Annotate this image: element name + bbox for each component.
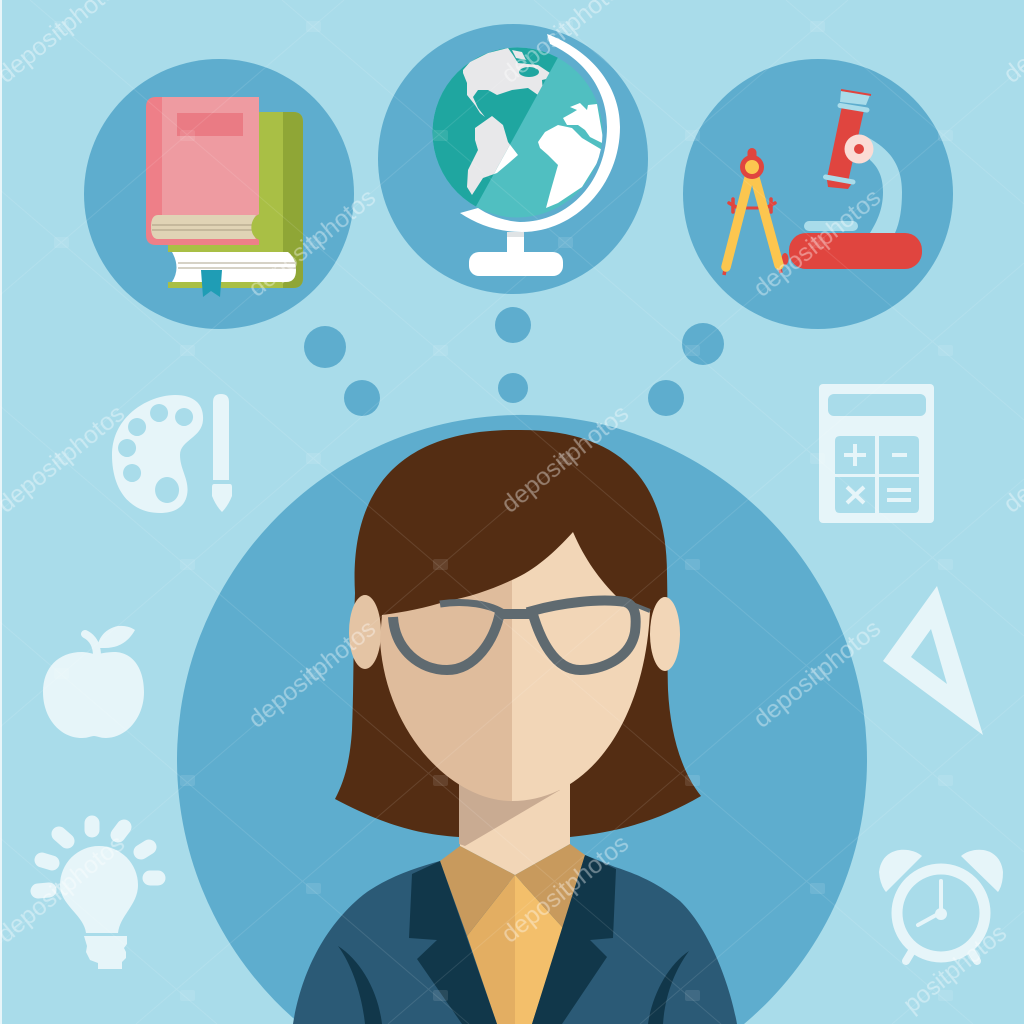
lapels	[409, 855, 616, 1024]
watermark text: depositphotos	[496, 399, 634, 519]
icon: compass	[724, 148, 788, 275]
icon: microscope	[789, 90, 922, 269]
hair	[335, 430, 701, 837]
watermark text: depositphotos	[748, 614, 886, 734]
central circle	[177, 415, 867, 1024]
watermark text: depositphotos	[243, 183, 381, 303]
thought bubble dots	[304, 307, 724, 416]
watermark text: positphotos	[898, 919, 1012, 1019]
teacher figure	[293, 430, 737, 1024]
watermark text: depositphotos	[243, 614, 381, 734]
watermark text: depositphotos	[496, 829, 634, 949]
icon: calculator	[819, 384, 934, 523]
icon: green book	[167, 112, 303, 297]
icon: globe	[432, 34, 620, 276]
ears	[349, 595, 381, 669]
jacket	[293, 855, 737, 1024]
shirt	[440, 844, 585, 1024]
icon: apple	[43, 626, 144, 738]
icon: palette and brush	[112, 394, 232, 513]
face	[380, 532, 650, 801]
glasses	[393, 601, 650, 670]
panel: science tools	[683, 59, 953, 329]
icon: alarm clock	[879, 850, 1003, 961]
watermark text: depositphotos	[748, 183, 886, 303]
jacket creases	[338, 946, 382, 1024]
panel: globe	[378, 24, 648, 294]
icon: light bulb	[38, 823, 158, 969]
icon: pink book	[146, 97, 260, 245]
neck	[459, 770, 570, 875]
icon: set square	[883, 586, 983, 735]
panel: books	[84, 59, 354, 329]
